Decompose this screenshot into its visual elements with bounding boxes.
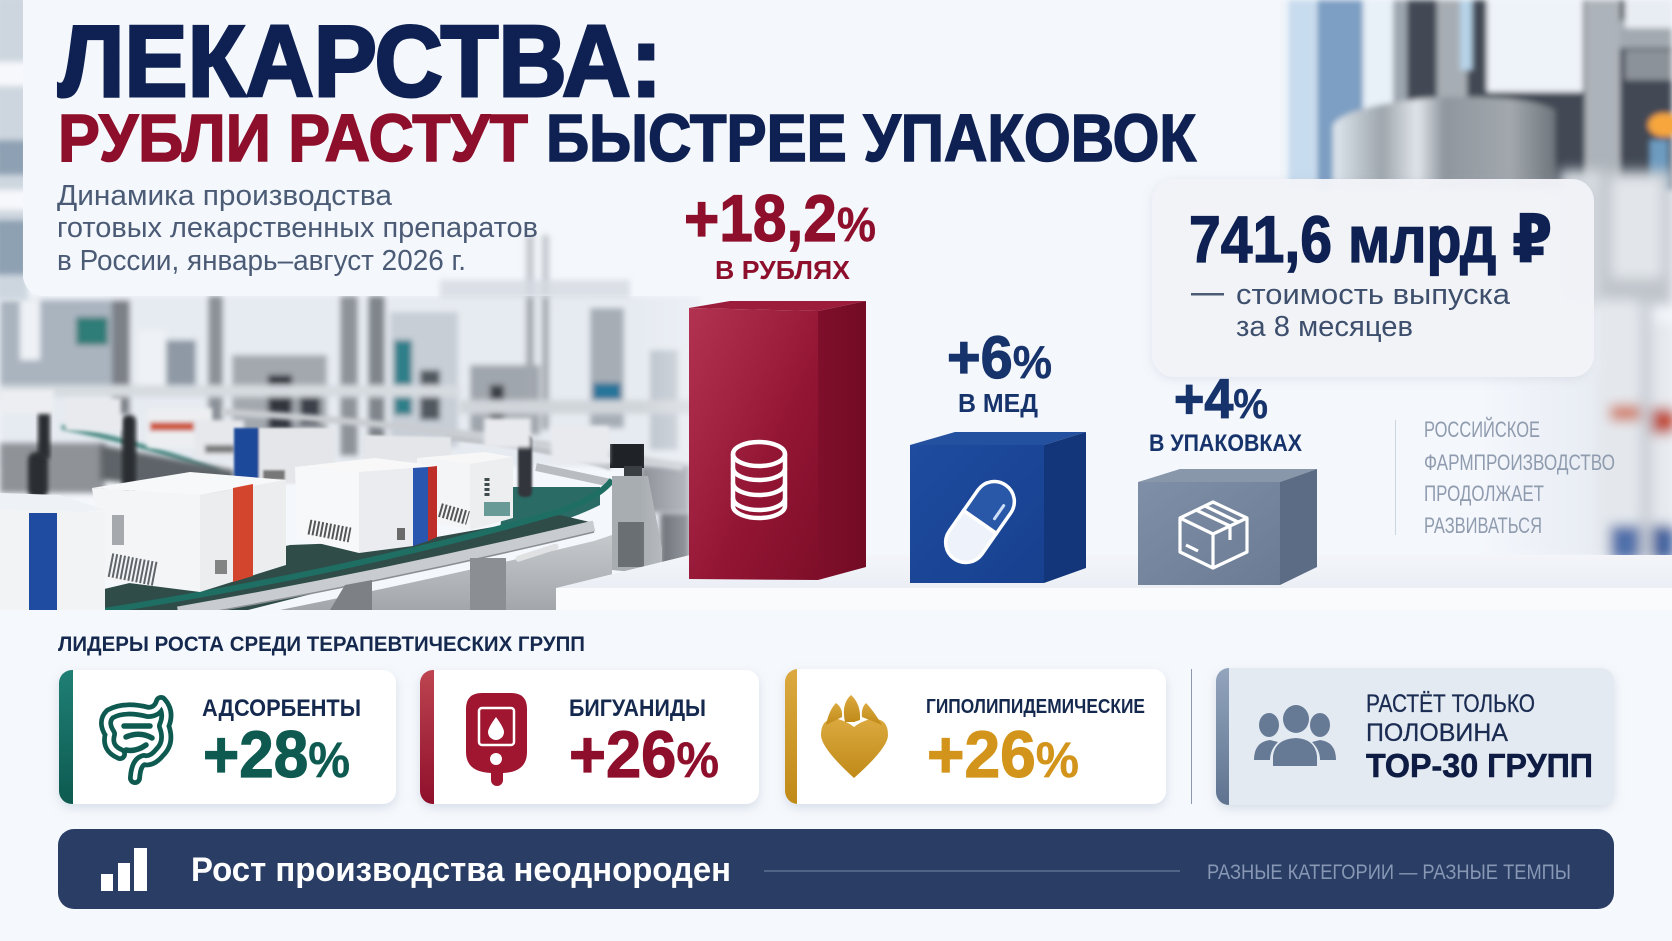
- icon: growth bars: [101, 848, 147, 891]
- subtitle: [57, 180, 538, 277]
- side note: РАЗВИВАТЬСЯ: [1424, 513, 1542, 538]
- card: half of top-30: ТОР-30 ГРУПП: [1366, 747, 1593, 784]
- label: +18,2% in rubles: В РУБЛЯХ: [715, 255, 851, 285]
- banner: [58, 829, 1614, 909]
- bar: rubles: [689, 301, 866, 580]
- side note: ФАРМПРОИЗВОДСТВО: [1424, 450, 1615, 475]
- icon: capsule: [938, 474, 1022, 570]
- card: adsorbents: [59, 670, 396, 804]
- photo: conveyor: [0, 410, 690, 618]
- card: adsorbents: АДСОРБЕНТЫ: [202, 695, 361, 722]
- callout: output value: 741,6 млрд ₽: [1189, 202, 1552, 276]
- fog panel over centre of photo: [640, 290, 1600, 612]
- divider: [1191, 669, 1192, 804]
- photo: box D: [417, 452, 513, 530]
- left photo strip: [0, 0, 28, 300]
- callout: output value: стоимость выпуска: [1236, 279, 1511, 311]
- card: half of top-30: [1216, 668, 1614, 805]
- title line 2: БЫСТРЕЕ УПАКОВОК: [546, 101, 1196, 176]
- icon: parcel: [1180, 502, 1247, 568]
- label: +6% in honey: +6%: [947, 324, 1052, 391]
- label: +4% in packages: [1149, 367, 1302, 457]
- label: +4% in packages: +4%: [1174, 367, 1268, 430]
- title line 1: ЛЕКАРСТВА:: [58, 6, 662, 118]
- label: +18,2% in rubles: +18,2%: [684, 181, 876, 255]
- card: lipid-lowering: ГИПОЛИПИДЕМИЧЕСКИЕ: [926, 696, 1145, 718]
- banner: РАЗНЫЕ КАТЕГОРИИ — РАЗНЫЕ ТЕМПЫ: [1207, 861, 1571, 884]
- bar: medians: [910, 432, 1086, 583]
- icon: glucometer: [466, 693, 527, 786]
- banner: Рост производства неоднороден: [191, 851, 731, 889]
- photo: distant boxes: [0, 390, 609, 464]
- bar: packages: [1138, 469, 1317, 585]
- label: +6% in honey: В МЕД: [958, 388, 1038, 418]
- card: adsorbents: +28%: [203, 717, 350, 791]
- icon: coin stack: [733, 442, 785, 518]
- side note: РОССИЙСКОЕ: [1424, 417, 1540, 442]
- card: half of top-30: РАСТЁТ ТОЛЬКО: [1366, 690, 1535, 718]
- photo: box A: [0, 493, 105, 610]
- photo: blurred equipment and bottles right: [1552, 161, 1672, 555]
- subtitle: Динамика производства: [57, 180, 393, 212]
- photo: production line background: [0, 0, 1672, 618]
- card: half of top-30: ПОЛОВИНА: [1366, 719, 1508, 747]
- photo: box C: [295, 458, 437, 553]
- side note: [1395, 417, 1615, 538]
- callout: output value: за 8 месяцев: [1236, 311, 1413, 343]
- section background: [0, 610, 1672, 941]
- subtitle: в России, январь–август 2026 г.: [57, 245, 466, 277]
- photo: box B: [92, 472, 286, 592]
- card: biguanides: +26%: [569, 717, 719, 791]
- title line 2 accent: РУБЛИ РАСТУТ: [58, 101, 528, 176]
- label: +4% in packages: В УПАКОВКАХ: [1149, 430, 1302, 457]
- icon: people: [1254, 705, 1336, 766]
- card: biguanides: БИГУАНИДЫ: [569, 695, 706, 722]
- section heading: ЛИДЕРЫ РОСТА СРЕДИ ТЕРАПЕВТИЧЕСКИХ ГРУПП: [58, 633, 585, 656]
- icon: heart: [821, 695, 888, 778]
- side note: ПРОДОЛЖАЕТ: [1424, 481, 1544, 506]
- header panel: [23, 0, 1200, 296]
- shelf: [556, 555, 1672, 610]
- card: biguanides: [420, 670, 759, 804]
- card: lipid-lowering: +26%: [927, 717, 1079, 791]
- callout: output value: [1152, 179, 1594, 377]
- card: lipid-lowering: [785, 669, 1166, 804]
- photo: blurred equipment top right: [1270, 0, 1672, 190]
- subtitle: готовых лекарственных препаратов: [57, 212, 538, 244]
- icon: intestine: [106, 702, 166, 778]
- title: [58, 6, 1196, 176]
